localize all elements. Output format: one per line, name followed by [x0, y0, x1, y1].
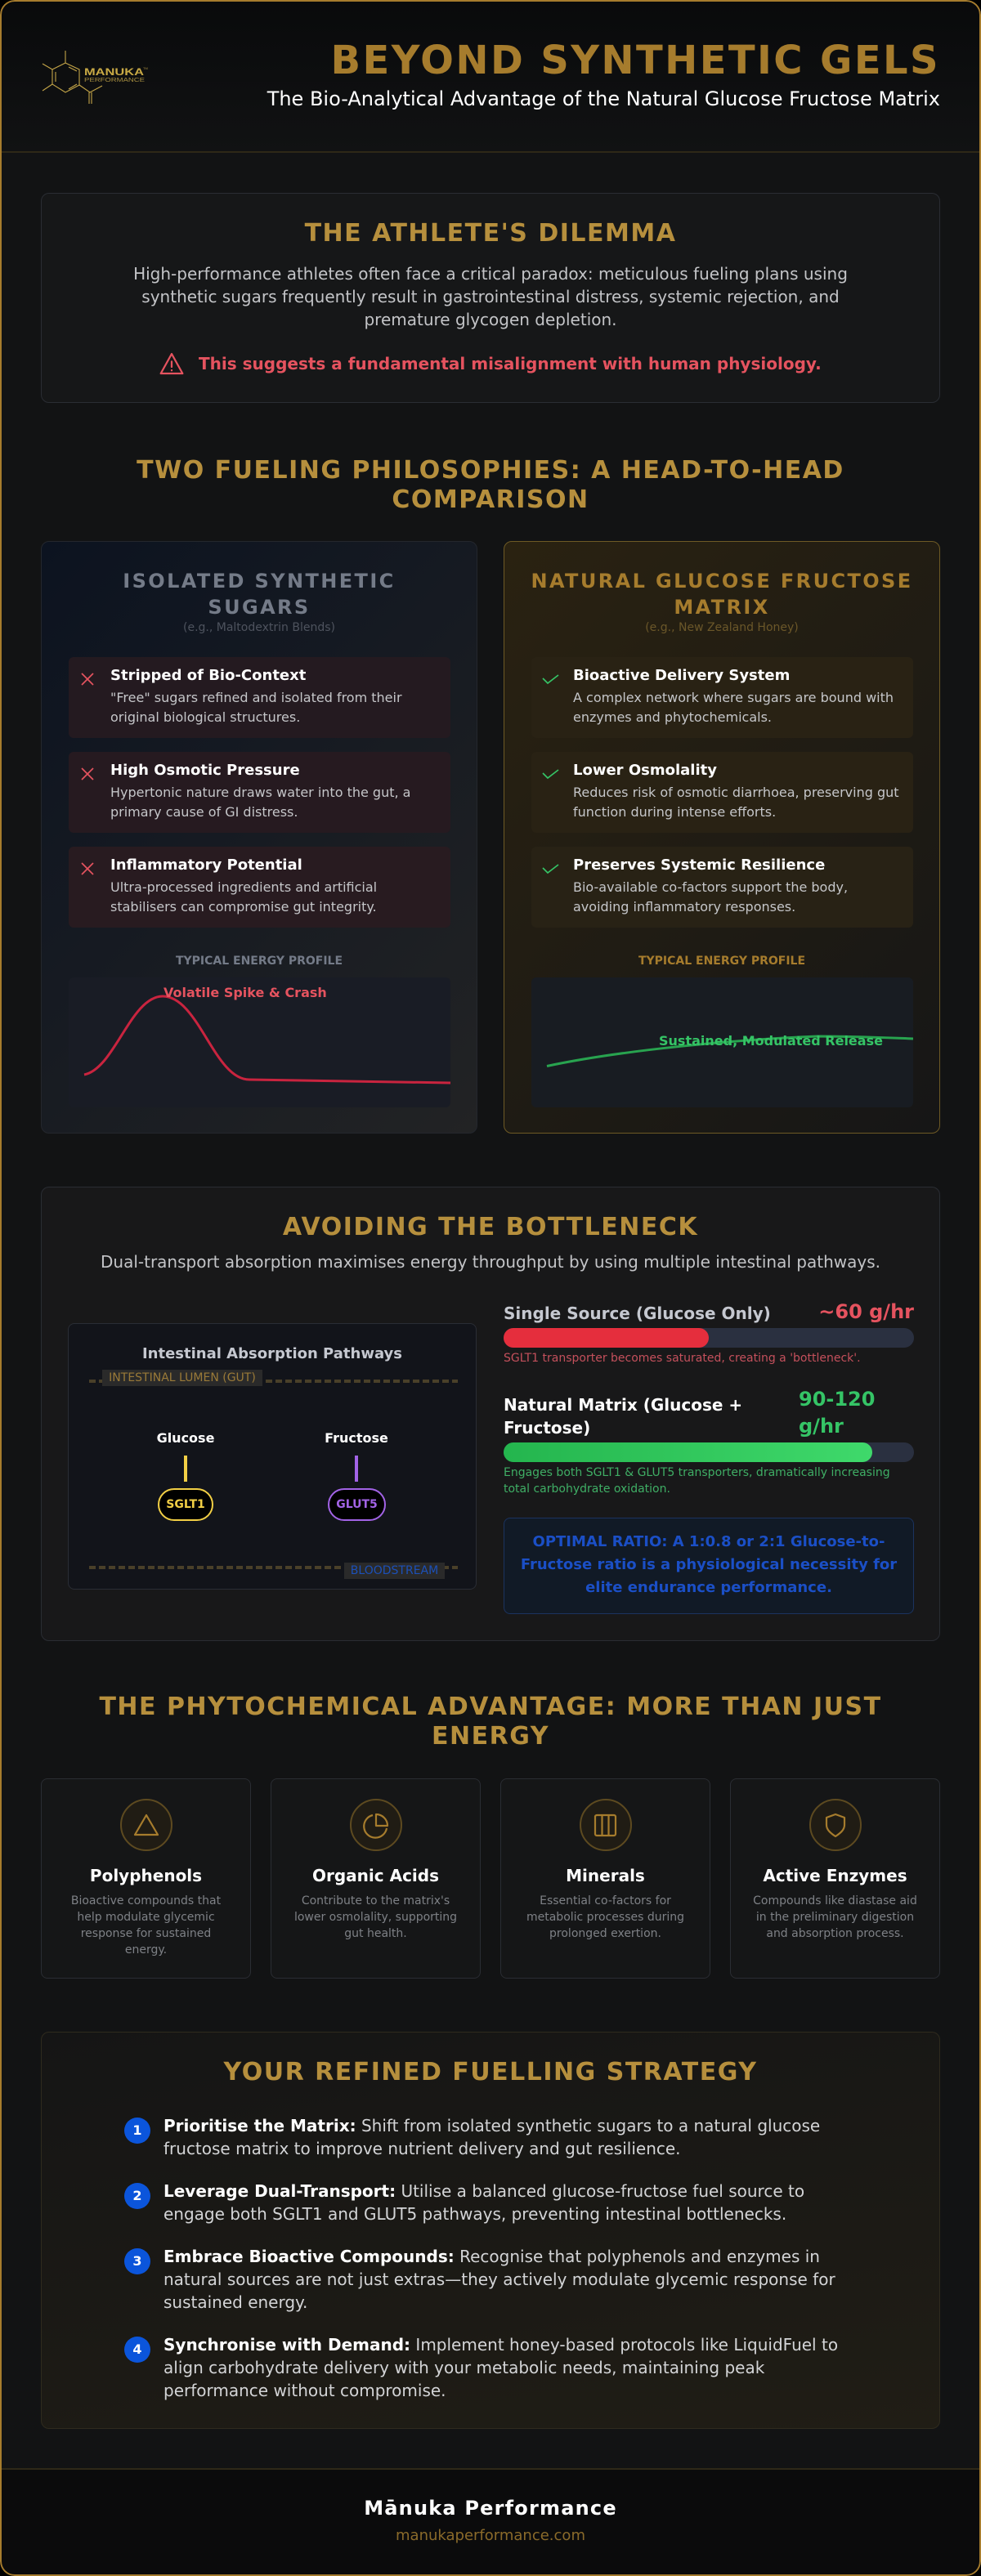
- item: lower osmolality: Lower Osmolality: [573, 762, 717, 779]
- heading: two fueling philosophies: TWO FUELING PHILOSOPHIES: A HEAD-TO-HEAD: [137, 456, 844, 485]
- card: active enzymes: in the preliminary digestion: [756, 1911, 914, 1924]
- card: organic acids: lower osmolality, supporting: [294, 1911, 457, 1924]
- chart: volatile spike and crash: Volatile Spike & Crash: [164, 985, 327, 1000]
- subtitle: The Bio-Analytical Advantage of the Natural Glucose Fructose Matrix: [267, 87, 940, 110]
- bar: natural matrix: total carbohydrate oxidation.: [504, 1483, 670, 1496]
- bar: natural matrix: [504, 1388, 914, 1496]
- icon: shield: [809, 1799, 862, 1851]
- heading: two fueling philosophies: COMPARISON: [392, 485, 589, 514]
- warning statement: This suggests a fundamental misalignment with human physiology.: [199, 354, 822, 373]
- diagram: intestinal absorption pathways: [68, 1323, 477, 1590]
- panel title: MATRIX: [674, 596, 770, 619]
- heading: AVOIDING THE BOTTLENECK: [283, 1213, 698, 1241]
- icon: triangle: [120, 1799, 172, 1851]
- item: stripped of bio-context: [69, 657, 450, 738]
- item: inflammatory potential: Ultra-processed ingredients and artificial: [110, 879, 377, 895]
- label: bloodstream: [344, 1563, 445, 1579]
- icon: pie chart: [350, 1799, 402, 1851]
- panel: the athlete's dilemma: [41, 193, 940, 403]
- text: Embrace Bioactive Compounds: Recognise that polyphenols and enzymes in: [164, 2247, 820, 2266]
- step 2: [124, 2181, 804, 2224]
- paragraph: synthetic sugars frequently result in gastrointestinal distress, systemic rejection, and: [141, 287, 840, 306]
- paragraph: High-performance athletes often face a critical paradox: meticulous fueling plans using: [133, 264, 848, 284]
- item: inflammatory potential: [69, 847, 450, 928]
- item: stripped of bio-context: "Free" sugars refined and isolated from their: [110, 690, 402, 705]
- step 3: [124, 2247, 835, 2312]
- card: polyphenols: Polyphenols: [90, 1866, 202, 1885]
- text: performance without compromise.: [164, 2381, 446, 2400]
- card: polyphenols: energy.: [125, 1943, 167, 1957]
- item: bioactive delivery system: A complex network where sugars are bound with: [573, 690, 894, 705]
- heading: your refined fuelling strategy: YOUR REFINED FUELLING STRATEGY: [224, 2058, 757, 2086]
- card: organic acids: gut health.: [344, 1927, 407, 1940]
- bar: single source: ~60 g/hr: [818, 1300, 914, 1323]
- item: stripped of bio-context: original biological structures.: [110, 709, 300, 725]
- item: lower osmolality: Reduces risk of osmotic diarrhoea, preserving gut: [573, 785, 899, 800]
- callout: optimal ratio: elite endurance performance.: [585, 1579, 832, 1596]
- bar: single source: [504, 1300, 914, 1365]
- card: minerals: Minerals: [566, 1866, 645, 1885]
- panel: isolated synthetic sugars: [41, 541, 477, 1134]
- bar: single source: Single Source (Glucose Only): [504, 1304, 771, 1323]
- text: align carbohydrate delivery with your metabolic needs, maintaining peak: [164, 2358, 764, 2377]
- card: polyphenols: [41, 1778, 251, 1979]
- pathway: fructose GLUT5: [325, 1430, 388, 1521]
- diagram title: Intestinal Absorption Pathways: [142, 1345, 402, 1362]
- item: stripped of bio-context: Stripped of Bio-Context: [110, 667, 306, 684]
- footer url: manukaperformance.com: [396, 2527, 585, 2544]
- card: polyphenols: help modulate glycemic: [77, 1911, 215, 1924]
- item: high osmotic pressure: [69, 752, 450, 833]
- panel title: [531, 570, 913, 619]
- icon: warning triangle: [160, 353, 183, 374]
- icon: Manuka Performance logo: TM: [143, 66, 148, 70]
- pathway: fructose GLUT5: GLUT5: [336, 1498, 378, 1511]
- chart: sustained modulated release: [531, 977, 913, 1107]
- text: Synchronise with Demand: Implement honey-based protocols like LiquidFuel to: [164, 2335, 838, 2355]
- card: organic acids: Contribute to the matrix's: [302, 1894, 450, 1907]
- text: 1: [132, 2122, 142, 2138]
- paragraph: premature glycogen depletion.: [364, 310, 617, 329]
- item: lower osmolality: function during intense efforts.: [573, 804, 776, 820]
- item: preserves systemic resilience: Bio-available co-factors support the body,: [573, 879, 848, 895]
- item: bioactive delivery system: enzymes and phytochemicals.: [573, 709, 772, 725]
- label: bloodstream: BLOODSTREAM: [351, 1564, 438, 1577]
- item: high osmotic pressure: primary cause of GI distress.: [110, 804, 298, 820]
- heading: the phytochemical advantage: [99, 1693, 882, 1751]
- text: natural sources are not just extras—they actively modulate glycemic response for: [164, 2270, 835, 2289]
- pathway: glucose SGLT1: SGLT1: [166, 1498, 205, 1511]
- label: intestinal lumen: INTESTINAL LUMEN (GUT): [109, 1371, 256, 1384]
- panel: avoiding the bottleneck: [41, 1187, 940, 1641]
- item: preserves systemic resilience: [531, 847, 913, 928]
- item: high osmotic pressure: High Osmotic Pressure: [110, 762, 300, 779]
- card: organic acids: Organic Acids: [312, 1866, 439, 1885]
- bar: natural matrix: Fructose): [504, 1418, 590, 1438]
- card: polyphenols: response for sustained: [81, 1927, 211, 1940]
- paragraph: [133, 264, 848, 329]
- panel title: [123, 570, 396, 619]
- pathway: glucose SGLT1: Glucose: [157, 1430, 214, 1446]
- panel title: NATURAL GLUCOSE FRUCTOSE: [531, 570, 913, 593]
- header band: [0, 0, 981, 153]
- text: 3: [132, 2253, 142, 2269]
- panel: refined fuelling strategy: [41, 2032, 940, 2429]
- pathway: fructose GLUT5: Fructose: [325, 1430, 388, 1446]
- panel subtitle: (e.g., Maltodextrin Blends): [183, 621, 335, 634]
- bar: natural matrix: 90-120: [799, 1388, 875, 1411]
- card: active enzymes: Compounds like diastase aid: [753, 1894, 917, 1907]
- item: preserves systemic resilience: Preserves Systemic Resilience: [573, 856, 825, 874]
- bar: natural matrix: g/hr: [799, 1415, 844, 1438]
- text: Leverage Dual-Transport: Utilise a balanced glucose-fructose fuel source to: [164, 2181, 804, 2201]
- item: lower osmolality: [531, 752, 913, 833]
- heading: THE ATHLETE'S DILEMMA: [305, 219, 676, 248]
- footer brand: Mānuka Performance: [364, 2497, 617, 2520]
- icon: Manuka Performance logo: MANUKA: [84, 66, 144, 78]
- card: polyphenols: Bioactive compounds that: [71, 1894, 221, 1907]
- panel: natural glucose fructose matrix: [504, 541, 940, 1134]
- subheading: Dual-transport absorption maximises energy throughput by using multiple intestinal pathways.: [101, 1252, 880, 1272]
- text: Prioritise the Matrix: Shift from isolated synthetic sugars to a natural glucose: [164, 2116, 820, 2135]
- icon: Manuka Performance logo: PERFORMANCE: [84, 78, 145, 83]
- panel title: SUGARS: [208, 596, 311, 619]
- card: minerals: prolonged exertion.: [549, 1927, 661, 1940]
- step 1: [124, 2116, 820, 2158]
- pathway: glucose SGLT1: [157, 1430, 214, 1521]
- text: 2: [132, 2188, 142, 2203]
- chart: sustained modulated release: Sustained, Modulated Release: [659, 1033, 883, 1049]
- footer: [0, 2468, 981, 2576]
- card: organic acids: [271, 1778, 481, 1979]
- item: inflammatory potential: Inflammatory Potential: [110, 856, 302, 874]
- callout: optimal ratio: [504, 1518, 914, 1614]
- card: minerals: Essential co-factors for: [540, 1894, 671, 1907]
- bar: single source: SGLT1 transporter becomes saturated, creating a 'bottleneck'.: [504, 1352, 861, 1365]
- icon: columns: [580, 1799, 632, 1851]
- item: high osmotic pressure: Hypertonic nature draws water into the gut, a: [110, 785, 410, 800]
- item: bioactive delivery system: Bioactive Delivery System: [573, 667, 790, 684]
- panel subtitle: (e.g., New Zealand Honey): [645, 621, 799, 634]
- card: active enzymes: and absorption process.: [766, 1927, 904, 1940]
- chart: volatile spike and crash: [69, 977, 450, 1107]
- panel title: ISOLATED SYNTHETIC: [123, 570, 396, 593]
- label: typical energy profile: TYPICAL ENERGY PROFILE: [176, 955, 343, 968]
- bar: natural matrix: Natural Matrix (Glucose +: [504, 1395, 742, 1415]
- text: 4: [132, 2341, 142, 2357]
- text: sustained energy.: [164, 2292, 307, 2312]
- text: engage both SGLT1 and GLUT5 pathways, preventing intestinal bottlenecks.: [164, 2204, 786, 2224]
- heading: the phytochemical advantage: ENERGY: [432, 1722, 549, 1751]
- item: bioactive delivery system: [531, 657, 913, 738]
- card: active enzymes: Active Enzymes: [763, 1866, 907, 1885]
- card: minerals: metabolic processes during: [526, 1911, 684, 1924]
- card: active enzymes: [730, 1778, 940, 1979]
- card: minerals: [500, 1778, 710, 1979]
- callout: optimal ratio: Fructose ratio is a physiological necessity for: [521, 1556, 897, 1573]
- title: BEYOND SYNTHETIC GELS: [331, 38, 940, 83]
- item: preserves systemic resilience: avoiding inflammatory responses.: [573, 899, 795, 915]
- step 4: [124, 2335, 838, 2400]
- label: typical energy profile: TYPICAL ENERGY PROFILE: [638, 955, 805, 968]
- icon: Manuka Performance logo: [43, 51, 148, 104]
- callout: optimal ratio: OPTIMAL RATIO: A 1:0.8 or 2:1 Glucose-to-: [533, 1533, 885, 1550]
- text: fructose matrix to improve nutrient delivery and gut resilience.: [164, 2139, 681, 2158]
- item: inflammatory potential: stabilisers can compromise gut integrity.: [110, 899, 377, 915]
- bar: natural matrix: Engages both SGLT1 & GLUT5 transporters, dramatically increasing: [504, 1466, 890, 1479]
- heading: two fueling philosophies: [137, 456, 844, 514]
- heading: the phytochemical advantage: THE PHYTOCHEMICAL ADVANTAGE: MORE THAN JUST: [99, 1693, 882, 1721]
